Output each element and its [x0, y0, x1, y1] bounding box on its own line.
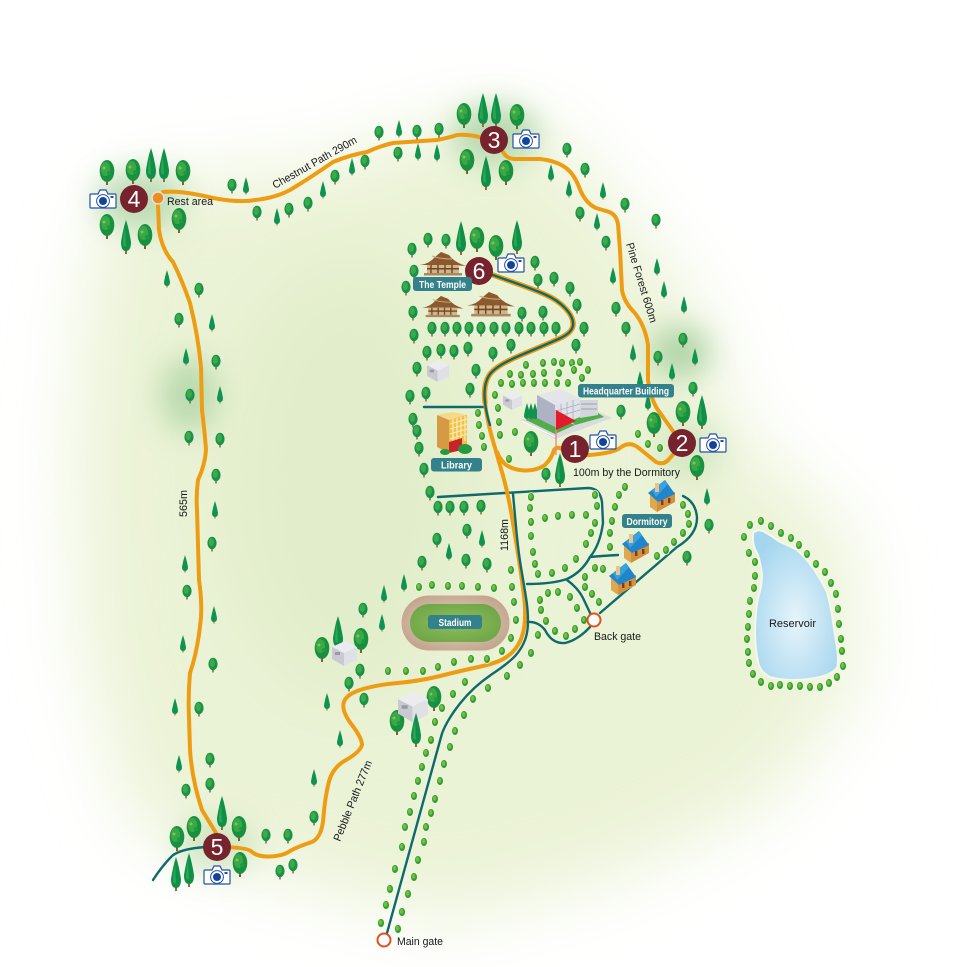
background: soft green terrain — [75, 105, 860, 920]
road network: teal paths — [153, 407, 697, 880]
label: Main gate: Main gate — [397, 936, 443, 948]
temple buildings — [420, 252, 515, 317]
reservoir lake — [753, 530, 838, 680]
main gate marker — [378, 934, 390, 946]
shrubs: dormitory and back gate area — [526, 482, 693, 641]
library building — [437, 412, 472, 455]
shrubs: around stadium — [384, 565, 520, 676]
small white buildings — [332, 360, 522, 722]
label: Headquarter Building: Headquarter Building — [583, 386, 669, 398]
stadium — [401, 595, 510, 651]
label: Pine Forest 600m: Pine Forest 600m — [623, 241, 659, 324]
stop marker 3: 3 — [488, 127, 500, 153]
label: Dormitory: Dormitory — [626, 517, 668, 528]
label: 565m: 565m — [178, 490, 190, 517]
label: 100m by the Dormitory: 100m by the Dormitory — [573, 467, 680, 479]
trees: around stop 3 — [457, 93, 524, 190]
label: Pebble Path 277m: Pebble Path 277m — [332, 759, 375, 843]
trees: along the 565m path — [164, 270, 225, 798]
shrubs: headquarter grounds — [474, 357, 664, 464]
stop marker 5 — [203, 833, 231, 861]
stop marker 1: 1 — [569, 436, 581, 462]
headquarter building — [520, 389, 612, 439]
dormitory houses — [609, 480, 675, 595]
label: The Temple: The Temple — [419, 280, 466, 291]
label: Library — [431, 458, 482, 472]
label: Chestnut Path 290m: Chestnut Path 290m — [271, 134, 359, 192]
stop marker 6 — [465, 257, 493, 285]
trees: along Chestnut Path — [227, 120, 554, 226]
label: The Temple — [413, 277, 472, 291]
label: Stadium: Stadium — [438, 618, 472, 629]
camera icon: stop 2 — [700, 434, 726, 452]
red flag — [555, 410, 576, 455]
trees: around stop 5 — [170, 769, 319, 891]
label: Stadium — [428, 615, 482, 629]
stop marker 1 — [561, 435, 589, 463]
shrubs: ring around reservoir — [740, 516, 847, 692]
trees: temple grounds — [401, 220, 589, 500]
label: Back gate: Back gate — [594, 631, 641, 643]
trees: around stop 4 — [100, 148, 190, 254]
label: Library: Library — [441, 460, 472, 472]
back gate marker — [588, 614, 600, 626]
camera icon: stop 3 — [513, 130, 539, 148]
stop marker 4: 4 — [128, 186, 141, 212]
label: Rest area: Rest area — [167, 196, 214, 208]
camera icon: stop 6 — [498, 254, 524, 272]
camera icon: stop 4 — [90, 190, 116, 208]
stop marker 2: 2 — [676, 430, 688, 456]
rest area marker — [152, 192, 164, 204]
camera icon: stop 5 — [204, 866, 230, 884]
shrubs: along the main gate road — [377, 648, 535, 934]
tree in front of lower building — [411, 713, 421, 747]
trees: central meadow — [315, 488, 714, 748]
trees: along Pine Forest — [524, 143, 707, 487]
camera icon: stop 1 — [590, 431, 616, 449]
label: Dormitory — [622, 514, 672, 528]
label: 1168m: 1168m — [499, 519, 511, 551]
walking trail: orange route — [158, 135, 680, 933]
stop marker 5: 5 — [211, 834, 223, 860]
stop marker 2 — [668, 429, 696, 457]
stop marker 3 — [480, 126, 508, 154]
stop marker 4 — [120, 185, 148, 213]
label: Reservoir: Reservoir — [769, 618, 816, 630]
stop marker 6: 6 — [473, 258, 485, 284]
